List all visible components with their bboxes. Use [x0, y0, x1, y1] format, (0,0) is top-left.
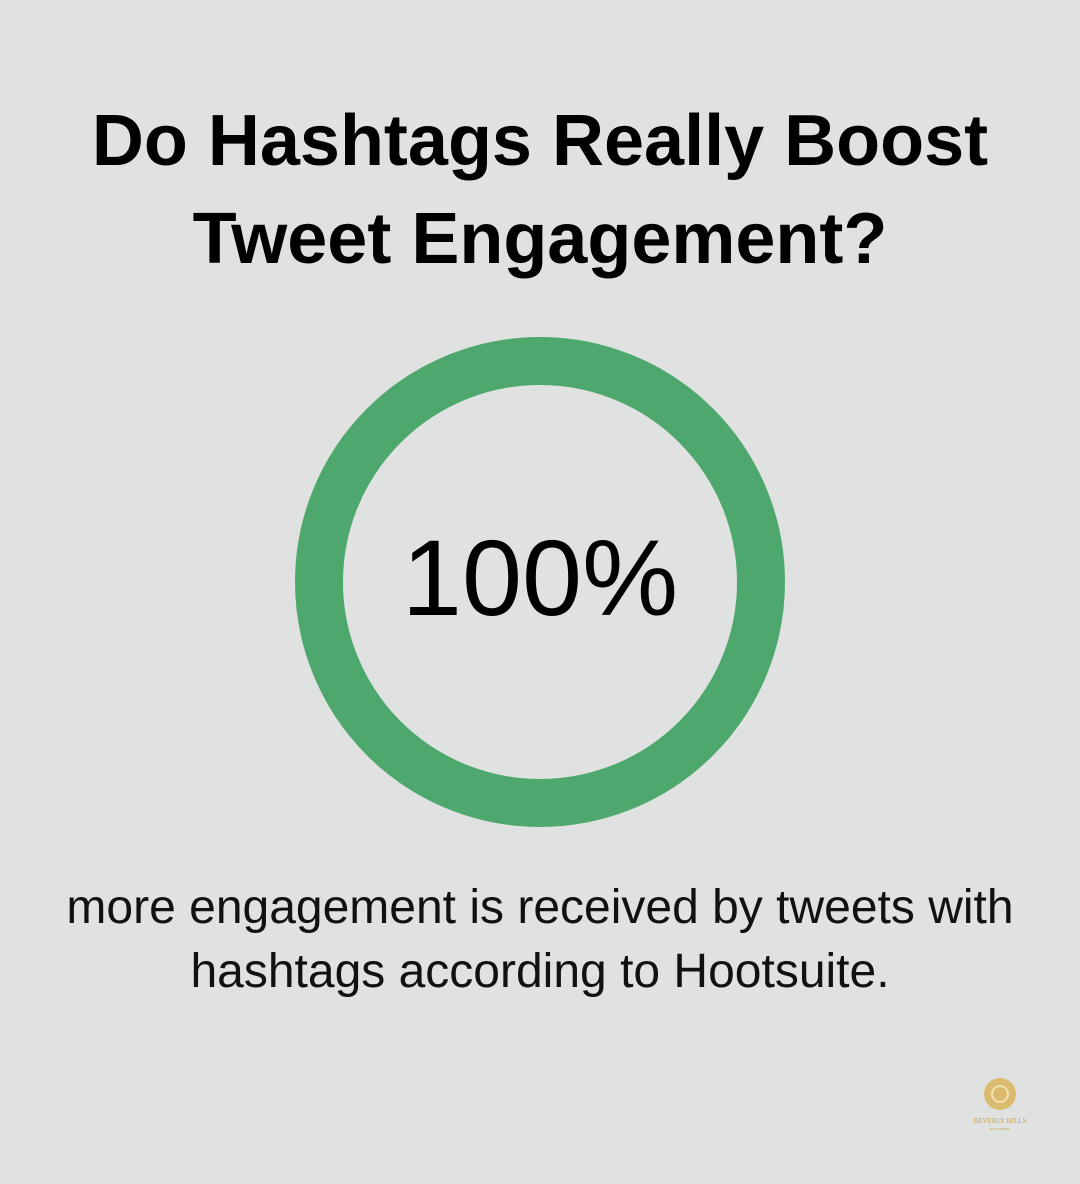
title: Do Hashtags Really Boost — [92, 101, 988, 181]
title — [92, 101, 988, 279]
title: Tweet Engagement? — [193, 199, 887, 279]
description text: hashtags according to Hootsuite. — [190, 945, 890, 998]
logo: Beverly Hills — [974, 1078, 1027, 1131]
stat value: 100% — [402, 517, 678, 638]
logo: Beverly Hills: BEVERLY HILLS — [974, 1117, 1027, 1125]
description text: more engagement is received by tweets with — [66, 881, 1014, 934]
logo: Beverly Hills: PUBLISHING — [990, 1127, 1011, 1131]
description text — [66, 881, 1014, 998]
ring chart: 100% — [295, 337, 785, 827]
